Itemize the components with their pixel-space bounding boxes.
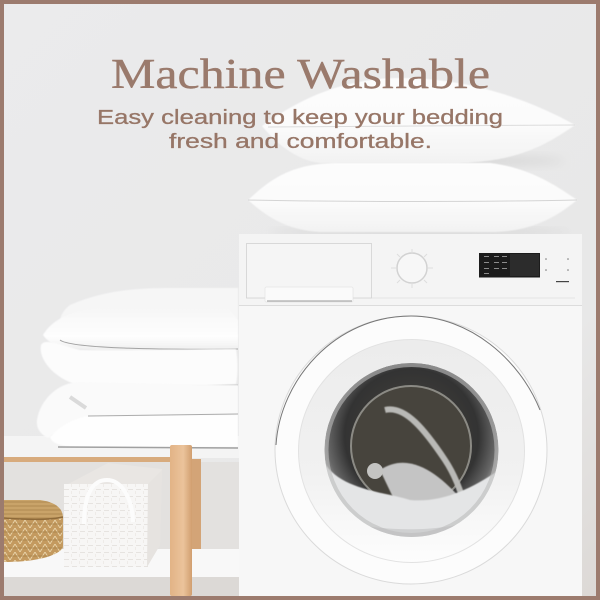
title: Machine Washable (111, 52, 490, 98)
folded duvets (37, 288, 238, 448)
subtitle: Easy cleaning to keep your bedding (97, 107, 503, 129)
buttons (545, 258, 569, 282)
washing machine (239, 234, 582, 596)
stacked pillows (248, 78, 577, 235)
machine body (239, 234, 582, 596)
wicker basket (4, 500, 63, 562)
dial (391, 249, 433, 288)
door glass (324, 363, 499, 540)
drawer handle (265, 287, 353, 302)
wooden shelf unit (4, 436, 239, 596)
display (479, 253, 540, 278)
control panel (239, 234, 582, 306)
white woven storage box (64, 463, 162, 567)
wooden front leg (170, 445, 192, 596)
subtitle: fresh and comfortable. (169, 131, 432, 153)
door (275, 316, 547, 584)
subtitle (97, 107, 503, 153)
detergent drawer (246, 244, 372, 298)
